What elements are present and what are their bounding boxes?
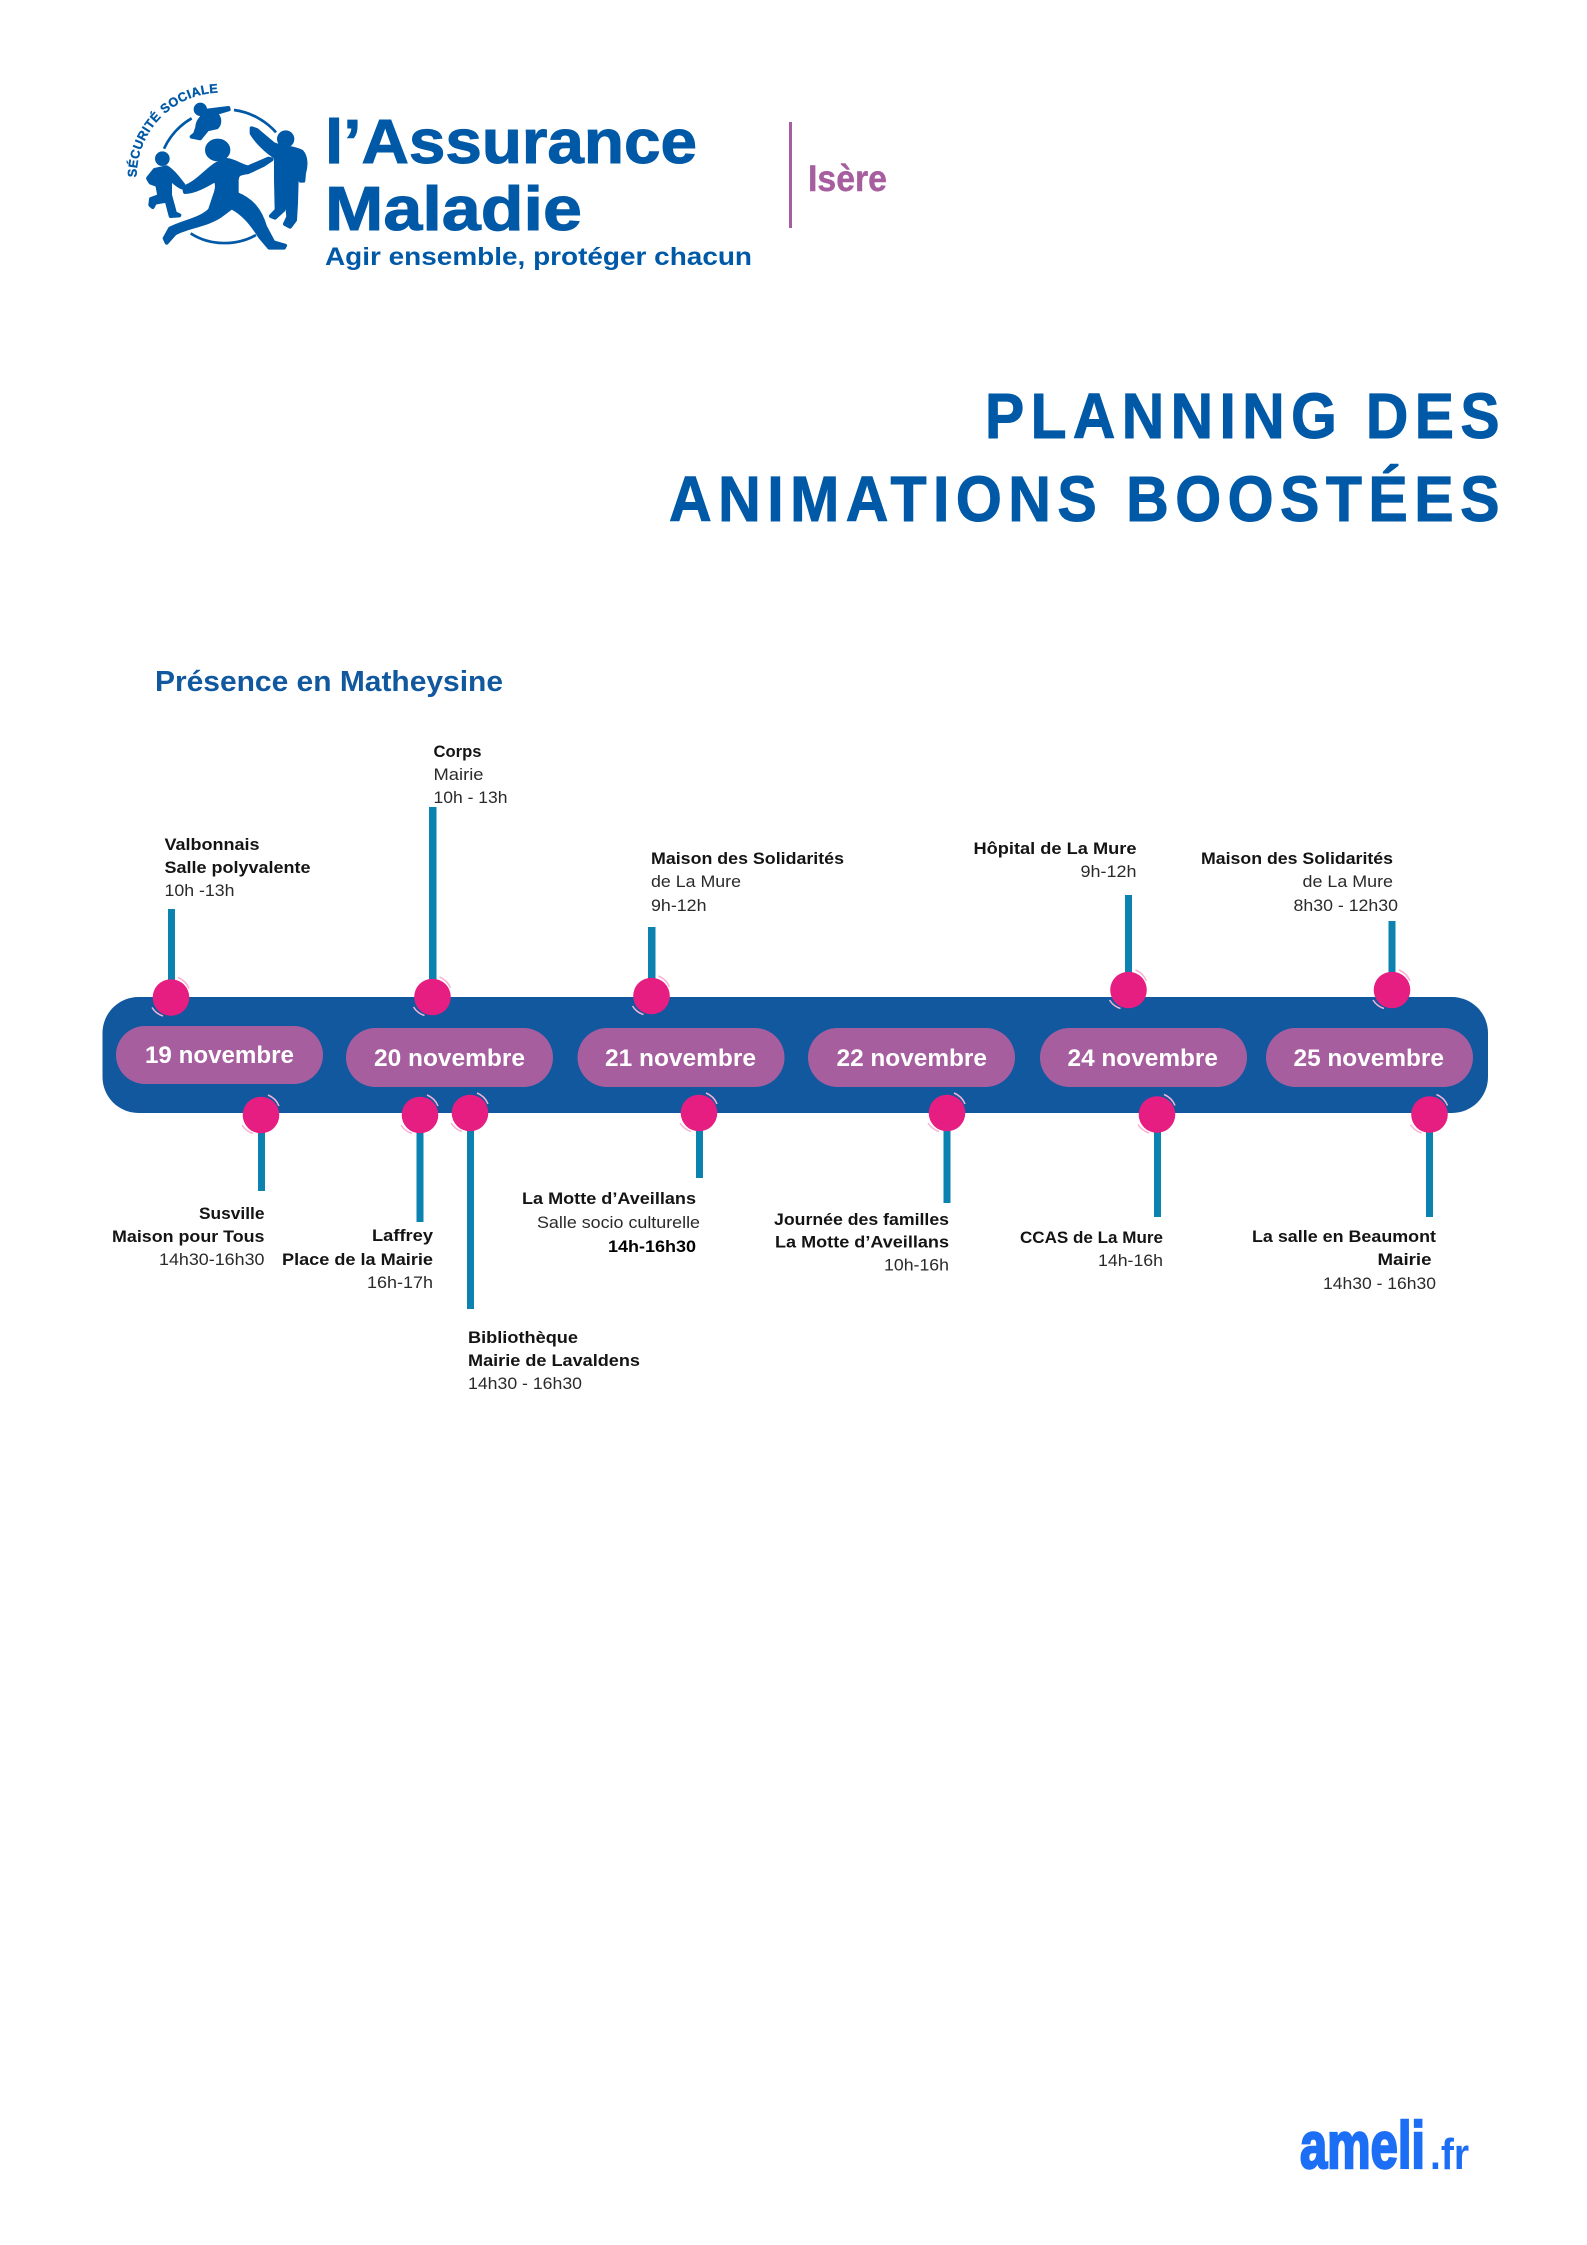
timeline bar [102, 997, 1488, 1113]
logo department: Isère: Isère [808, 158, 887, 199]
logo: l'Assurance Maladie [126, 84, 887, 271]
label: La Motte d'Aveillans: Salle socio culturelle [537, 1213, 700, 1232]
label: Susville: Susville [199, 1204, 264, 1223]
logo wordmark: Maladie: Maladie [325, 175, 582, 244]
label: Journée des familles [774, 1210, 949, 1274]
label: Bibliothèque: Bibliothèque [468, 1328, 578, 1347]
label: Journée des familles: Journée des familles [774, 1210, 949, 1229]
date pill: 20 novembre: 20 novembre [374, 1045, 525, 1072]
label: Maison des Solidarités 21 novembre: Maison des Solidarités [651, 849, 844, 868]
timeline [102, 807, 1488, 1309]
label: Journée des familles: La Motte d’Aveillans [775, 1232, 949, 1252]
label: La Motte d'Aveillans [522, 1189, 700, 1256]
label: Valbonnais [164, 835, 310, 900]
label: La salle en Beaumont: La salle en Beaumont [1252, 1227, 1436, 1246]
label: La salle en Beaumont [1252, 1227, 1436, 1293]
icon: Sécurité sociale emblem [126, 84, 308, 250]
label: Corps: 10h - 13h [434, 788, 508, 807]
label: Bibliothèque: 14h30 - 16h30 [468, 1374, 582, 1393]
logo tagline: Agir ensemble, protéger chacun [325, 243, 752, 271]
label: Hôpital de La Mure [974, 839, 1136, 881]
date pill: 24 novembre: 24 novembre [1068, 1045, 1218, 1072]
label: Laffrey [282, 1226, 434, 1292]
label: La Motte d'Aveillans: La Motte d’Aveillans [522, 1189, 696, 1208]
date pill: 22 novembre [808, 1028, 1015, 1087]
label: Bibliothèque: Mairie de Lavaldens [468, 1351, 640, 1370]
title line 1: PLANNING DES [985, 380, 1506, 452]
date pill: 19 novembre: 19 novembre [145, 1042, 294, 1069]
label: Valbonnais: 10h -13h [164, 881, 234, 900]
heading: Présence en Matheysine: Présence en Matheysine [155, 666, 503, 698]
label: Maison des Solidarités 25 novembre: Maison des Solidarités [1201, 849, 1393, 868]
label: Susville: 14h30-16h30 [159, 1250, 264, 1269]
date pill: 20 novembre [346, 1028, 553, 1087]
icon: Sécurité sociale emblem: SÉCURITÉ SOCIALE [126, 84, 218, 178]
logo: ameli.fr: ameli [1300, 2108, 1425, 2182]
label: Corps: Mairie [434, 765, 484, 784]
date pill: 24 novembre [1040, 1028, 1247, 1087]
label: Journée des familles: 10h-16h [884, 1256, 949, 1274]
label: Maison des Solidarités 25 novembre: de La Mure [1302, 872, 1393, 891]
label: CCAS de La Mure: CCAS de La Mure [1020, 1228, 1163, 1247]
date pill: 25 novembre: 25 novembre [1294, 1045, 1444, 1072]
logo wordmark: l'Assurance: l’Assurance [325, 108, 697, 177]
label: Maison des Solidarités 21 novembre: de La Mure [651, 872, 741, 891]
label: Susville [112, 1204, 264, 1269]
date pill: 21 novembre: 21 novembre [605, 1045, 756, 1072]
date pill: 22 novembre: 22 novembre [836, 1045, 987, 1072]
label: Laffrey: Laffrey [372, 1226, 434, 1245]
date pill: 19 novembre [116, 1026, 323, 1084]
timeline dots [152, 970, 1448, 1134]
label: Maison des Solidarités 21 novembre [651, 849, 844, 915]
label: Maison des Solidarités 25 novembre [1201, 849, 1398, 915]
logo divider [789, 122, 792, 228]
label: CCAS de La Mure: 14h-16h [1098, 1251, 1163, 1270]
title line 2: ANIMATIONS BOOSTÉES [669, 463, 1506, 535]
label: Hôpital de La Mure: 9h-12h [1080, 862, 1136, 881]
label: La salle en Beaumont: 14h30 - 16h30 [1323, 1274, 1436, 1293]
label: Valbonnais: Salle polyvalente [164, 858, 310, 877]
label: Corps [434, 742, 508, 807]
label: Bibliothèque [468, 1328, 640, 1393]
label: La salle en Beaumont: Mairie [1378, 1250, 1432, 1269]
label: Laffrey: 16h-17h [367, 1273, 433, 1292]
logo: ameli.fr: .fr [1430, 2130, 1469, 2179]
title [669, 380, 1506, 535]
label: Maison des Solidarités 21 novembre: 9h-12h [651, 896, 706, 915]
label: Corps: Corps [434, 742, 482, 761]
label: La Motte d'Aveillans: 14h-16h30 [608, 1237, 696, 1256]
label: Maison des Solidarités 25 novembre: 8h30 - 12h30 [1294, 896, 1398, 915]
label: Laffrey: Place de la Mairie [282, 1250, 433, 1269]
label: CCAS de La Mure [1020, 1228, 1163, 1270]
label: Hôpital de La Mure: Hôpital de La Mure [974, 839, 1136, 858]
timeline stems [168, 807, 1433, 1309]
label: Valbonnais: Valbonnais [164, 835, 260, 854]
label: Susville: Maison pour Tous [112, 1227, 264, 1246]
date pill: 25 novembre [1266, 1028, 1473, 1087]
date pill: 21 novembre [578, 1028, 784, 1087]
